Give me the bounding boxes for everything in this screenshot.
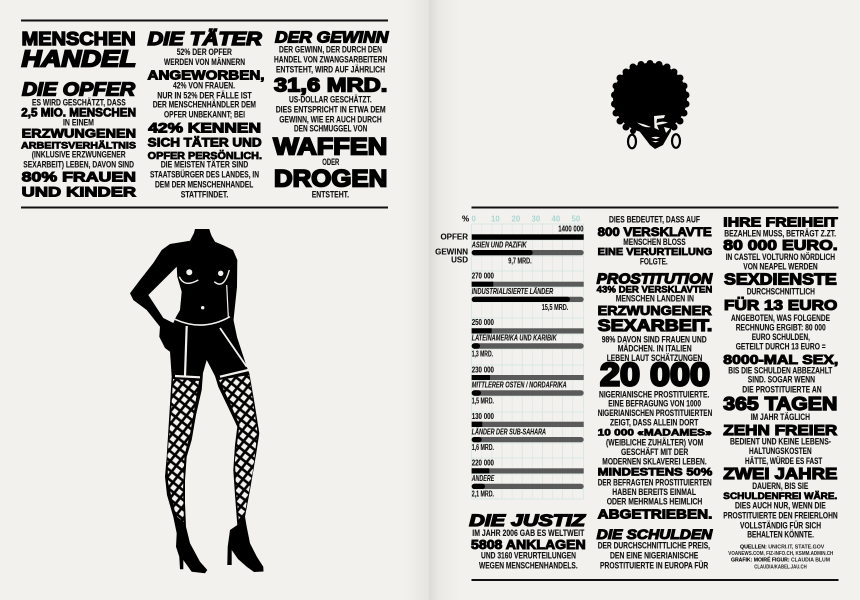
text block: Prostitution: MENSCHEN LANDEN IN — [616, 294, 694, 304]
region: Andere: 2,1 MRD. — [472, 490, 494, 499]
text block: die Schulden, column 2: DIE PROSTITUIERTE AN — [742, 384, 822, 394]
text block: die Täter — [148, 47, 264, 199]
text block: die Justiz: IM JAHR 2006 GAB ES WELTWEIT — [472, 528, 585, 538]
text block: die Täter: DER MENSCHENHÄNDLER DEM — [153, 100, 256, 110]
region: Lateinamerika und Karibik: 1,3 MRD. — [472, 350, 493, 358]
axis labels: 30 — [532, 215, 541, 224]
text block: der Gewinn: 31,6 MRD. — [274, 75, 387, 97]
text block: die Täter: 42% VON FRAUEN. — [173, 80, 235, 90]
text block: die Schulden, column 2: 80 000 EURO. — [723, 238, 838, 254]
region: Lateinamerika und Karibik — [472, 318, 584, 358]
heading: die Justiz: DIE JUSTIZ — [469, 511, 586, 530]
text block: Prostitution: GESCHÄFT MIT DER — [621, 447, 689, 457]
text block: Prostitution: HABEN BEREITS EINMAL — [612, 487, 696, 497]
panel: die Täter — [148, 28, 264, 199]
text block: die Schulden, column 2: SCHULDENFREI WÄRE. — [723, 491, 837, 502]
axis labels: 0 — [472, 215, 476, 224]
text block: Prostitution: MODERNEN SKLAVEREI LEBEN. — [602, 456, 707, 466]
text block: der Gewinn: GEWINN, WIE ER AUCH DURCH — [279, 114, 382, 124]
text block: die Schulden, column 2: GETEILT DURCH 13 EURO = — [736, 341, 826, 351]
text block: Verurteilungen — [598, 214, 713, 266]
text block: der Gewinn: DROGEN — [274, 166, 387, 193]
text block: die Schulden, column 2: SEXDIENSTE — [724, 271, 837, 288]
text block: die Schulden, column 1: DEN EINE NIGERIANISCHE — [610, 550, 698, 560]
text block: Prostitution: MÄDCHEN. IN ITALIEN — [618, 344, 692, 354]
text block: die Schulden, column 2: BEHALTEN KÖNNTE. — [747, 530, 814, 540]
text block: die Schulden, column 2: IHRE FREIHEIT — [723, 215, 838, 230]
axis labels: 50 — [572, 215, 581, 224]
text block: Prostitution: NIGERIANISCHE PROSTITUIERTE. — [599, 389, 709, 399]
text block: die Täter: WERDEN VON MÄNNERN — [164, 57, 245, 67]
chart: victims and profit by region — [435, 215, 584, 499]
text block: die Justiz — [471, 528, 586, 570]
text block: die Schulden, column 2: DIES AUCH NUR, WENN DIE — [735, 500, 826, 510]
region: Asien und Pazifik: ASIEN UND PAZIFIK — [471, 240, 527, 249]
text block: die Opfer: ARBEITSVERHÄLTNIS — [21, 140, 136, 151]
text block: Verurteilungen: MENSCHEN BLOSS — [623, 237, 686, 247]
title — [22, 28, 136, 72]
text block: Prostitution: MINDESTENS 50% — [598, 467, 713, 479]
illustration: female figure in fishnet stockings — [130, 229, 265, 573]
text block: Prostitution: 43% DER VERSKLAVTEN — [597, 284, 712, 294]
region: Länder der Sub-Sahara — [472, 412, 584, 452]
row labels: GEWINN — [435, 247, 468, 256]
row labels — [435, 232, 468, 264]
region: Mittlerer Osten / Nordafrika: MITTLERER OSTEN / NORDAFRIKA — [472, 381, 567, 390]
region: industrialisierte Länder: INDUSTRIALISIERTE LÄNDER — [472, 286, 553, 296]
region: Asien und Pazifik: 1400 000 — [558, 225, 584, 234]
text block: die Opfer — [21, 98, 136, 200]
text block: die Schulden, column 2: EURO SCHULDEN, — [752, 332, 810, 342]
text block: Prostitution: EINE BEFRAGUNG VON 1000 — [608, 399, 701, 409]
grid — [472, 224, 584, 499]
text block: die Schulden, column 2: SIND. SOGAR WENN — [748, 375, 815, 385]
region: Lateinamerika und Karibik: LATEINAMERIKA UND KARIBIK — [472, 334, 557, 343]
panel: Menschenhandel und die Opfer — [21, 28, 136, 200]
text block: die Opfer: IN EINEM — [63, 118, 94, 128]
text block: der Gewinn: DEN SCHMUGGEL VON — [294, 124, 367, 134]
region: Asien und Pazifik — [471, 225, 584, 265]
text block: die Opfer: 80% FRAUEN — [22, 169, 136, 185]
text block: die Täter: DIE MEISTEN TÄTER SIND — [161, 160, 249, 170]
text block: die Täter: STATTFINDET. — [181, 189, 228, 199]
axis labels: 20 — [512, 215, 521, 224]
text block: die Täter: OPFER UNBEKANNT; BEI — [164, 110, 245, 120]
region: industrialisierte Länder: 270 000 — [472, 271, 494, 280]
text block: Prostitution: SEXARBEIT. — [598, 316, 712, 335]
title: HANDEL — [22, 46, 136, 72]
text block: die Schulden, column 2: VON NEAPEL WERDEN — [743, 261, 818, 271]
text block: die Schulden, column 2: BEDIENT UND KEINE LEBENS- — [730, 436, 831, 446]
text block: Prostitution: ZEIGT, DASS ALLEIN DORT — [610, 418, 699, 428]
row labels: USD — [451, 255, 468, 264]
axis labels: % — [462, 215, 469, 224]
text block: die Täter: DEM DER MENSCHENHANDEL — [155, 179, 254, 189]
panel: Prostitution — [597, 271, 713, 521]
text block: der Gewinn: DER GEWINN, DER DURCH DEN — [279, 44, 382, 54]
credits: sources and graphic: QUELLEN: UNICRI.IT, STATE.GOV — [740, 544, 824, 550]
heading: der Gewinn: DER GEWINN — [275, 30, 389, 47]
text block: Prostitution: (WEIBLICHE ZUHÄLTER) VOM — [606, 438, 703, 448]
text block: die Opfer: SEXARBEIT) LEBEN, DAVON SIND — [23, 160, 134, 170]
text block: die Schulden, column 2 — [723, 215, 838, 540]
text block: die Schulden, column 2: VOLLSTÄNDIG FÜR SICH — [740, 520, 821, 530]
text block: der Gewinn — [273, 44, 387, 199]
region: industrialisierte Länder: 15,5 MRD. — [542, 303, 568, 312]
axis labels: 40 — [552, 215, 561, 224]
text block: Prostitution: ABGETRIEBEN. — [598, 506, 712, 521]
text block: die Täter: ANGEWORBEN, — [148, 67, 264, 82]
text block: Prostitution: ERZWUNGENER — [598, 304, 712, 318]
region: Mittlerer Osten / Nordafrika: 230 000 — [472, 365, 494, 374]
region: Asien und Pazifik: 9,7 MRD. — [508, 256, 532, 265]
text block: die Schulden, column 2: DURCHSCHNITTLICH — [747, 286, 815, 296]
text block: die Täter: OPFER PERSÖNLICH. — [148, 149, 262, 162]
panel: die Schulden — [597, 215, 838, 570]
region: Andere: 220 000 — [472, 459, 494, 468]
lingerie lines — [175, 270, 248, 377]
text block: die Schulden, column 2: 365 TAGEN — [723, 393, 837, 414]
text block: die Justiz: 5808 ANKLAGEN — [471, 538, 586, 552]
text block: Verurteilungen: DIES BEDEUTET, DASS AUF — [609, 214, 700, 224]
text block: die Täter: 52% DER OPFER — [177, 47, 232, 57]
text block: die Schulden, column 2: HALTUNGSKOSTEN — [749, 446, 812, 456]
panel: der Gewinn — [273, 30, 389, 199]
panel: die Justiz — [469, 511, 586, 570]
text block: Prostitution: LEBEN LAUT SCHÄTZUNGEN — [607, 353, 702, 363]
text block: die Justiz: UND 3160 VERURTEILUNGEN — [481, 550, 576, 560]
heading: die Täter: DIE TÄTER — [148, 28, 262, 49]
text block: Prostitution: ODER MEHRMALS HEIMLICH — [607, 496, 702, 506]
text block: Verurteilungen: FOLGTE. — [640, 256, 668, 266]
heading: die Schulden: DIE SCHULDEN — [597, 527, 713, 542]
text block: die Opfer: UND KINDER — [22, 184, 136, 200]
text block: der Gewinn: HANDEL VON ZWANGSARBEITERN — [274, 54, 387, 64]
text block: die Schulden, column 2: IM JAHR TÄGLICH — [751, 412, 810, 422]
region: Andere: ANDERE — [471, 474, 495, 483]
text block: die Täter: STAATSBÜRGER DES LANDES, IN — [150, 169, 259, 179]
region: industrialisierte Länder — [472, 271, 584, 312]
text block: der Gewinn: ODER — [322, 157, 340, 167]
text block: die Täter: NUR IN 52% DER FÄLLE IST — [157, 90, 252, 100]
region: Länder der Sub-Sahara: 130 000 — [472, 412, 494, 421]
text block: die Justiz: WEGEN MENSCHENHANDELS. — [479, 560, 578, 570]
heading: Prostitution: PROSTITUTION — [597, 271, 713, 287]
text block: die Schulden, column 1: DER DURCHSCHNITTLICHE PREIS, — [598, 540, 710, 550]
text block: der Gewinn: DIES ENTSPRICHT IN ETWA DEM — [276, 104, 386, 114]
text block: der Gewinn: ENTSTEHT. — [312, 189, 349, 199]
text block: Prostitution: 98% DAVON SIND FRAUEN UND — [602, 334, 707, 344]
credits: sources and graphic: CLAUDIA/KABEL.JAU.CH — [754, 564, 807, 570]
region: Länder der Sub-Sahara: LÄNDER DER SUB-SAHARA — [472, 426, 546, 436]
title: MENSCHEN — [22, 28, 136, 49]
text block: der Gewinn: WAFFEN — [273, 133, 387, 160]
text block: die Opfer: ES WIRD GESCHÄTZT, DASS — [32, 98, 126, 108]
text block: die Täter: 42% KENNEN — [148, 119, 261, 135]
arm gap — [148, 267, 182, 323]
text block: die Opfer: ERZWUNGENEN — [22, 127, 136, 141]
illustration: head with afro and earrings — [611, 60, 690, 149]
text block: die Schulden, column 2: RECHNUNG ERGIBT: 80 000 — [736, 323, 826, 333]
row labels: OPFER — [440, 232, 468, 242]
axis labels — [462, 215, 581, 224]
text block: Prostitution: NIGERIANISCHEN PROSTITUIERTEN — [598, 408, 712, 418]
credits: sources and graphic: VOANEWS.COM, FIZ-INFO.CH, KSMM.ADMIN.CH — [728, 551, 833, 557]
axis labels: 10 — [491, 215, 500, 224]
face features — [637, 115, 670, 142]
text block: Prostitution: DER BEFRAGTEN PROSTITUIERTEN — [598, 478, 712, 488]
text block: die Schulden, column 1 — [598, 540, 710, 570]
text block: die Schulden, column 2: 8000-MAL SEX, — [723, 352, 838, 367]
region: Lateinamerika und Karibik: 250 000 — [472, 318, 494, 327]
text block: die Schulden, column 2: ZWEI JAHRE — [723, 466, 838, 483]
credits: sources and graphic — [728, 544, 833, 570]
region: Andere — [471, 459, 584, 499]
text block: die Opfer: 2,5 MIO. MENSCHEN — [21, 108, 136, 120]
text block: Verurteilungen: EINE VERURTEILUNG — [598, 247, 713, 258]
text block: die Täter: SICH TÄTER UND — [148, 135, 262, 150]
region: Länder der Sub-Sahara: 1,6 MRD. — [472, 443, 494, 452]
text block: Prostitution — [597, 284, 713, 521]
text block: Verurteilungen: 800 VERSKLAVTE — [598, 225, 712, 239]
region: Mittlerer Osten / Nordafrika — [472, 365, 584, 405]
text block: der Gewinn: ENTSTEHT, WIRD AUF JÄHRLICH — [276, 64, 385, 74]
text block: die Schulden, column 2: DAUERN, BIS SIE — [752, 481, 808, 491]
heading: die Opfer: DIE OPFER — [22, 80, 135, 100]
credits: sources and graphic: GRAFIK: MOIRÉ FIGUR: CLAUDIA BLUM — [731, 556, 830, 564]
text block: Prostitution: 10 000 «MADAMES» — [598, 428, 712, 439]
text block: die Schulden, column 2: FÜR 13 EURO — [724, 297, 837, 314]
text block: die Schulden, column 2: ZEHN FREIER — [723, 422, 837, 439]
text block: die Opfer: (INKLUSIVE ERZWUNGENER — [32, 150, 126, 160]
text block: die Schulden, column 2: HÄTTE, WÜRDE ES FAST — [745, 456, 823, 466]
text block: die Schulden, column 1: PROSTITUIERTE IN EUROPA FÜR — [600, 560, 709, 570]
text block: der Gewinn: US-DOLLAR GESCHÄTZT. — [289, 94, 372, 104]
fishnet stockings — [168, 375, 258, 522]
region: Mittlerer Osten / Nordafrika: 1,5 MRD. — [472, 396, 494, 405]
text block: Prostitution: 20 000 — [600, 356, 710, 392]
